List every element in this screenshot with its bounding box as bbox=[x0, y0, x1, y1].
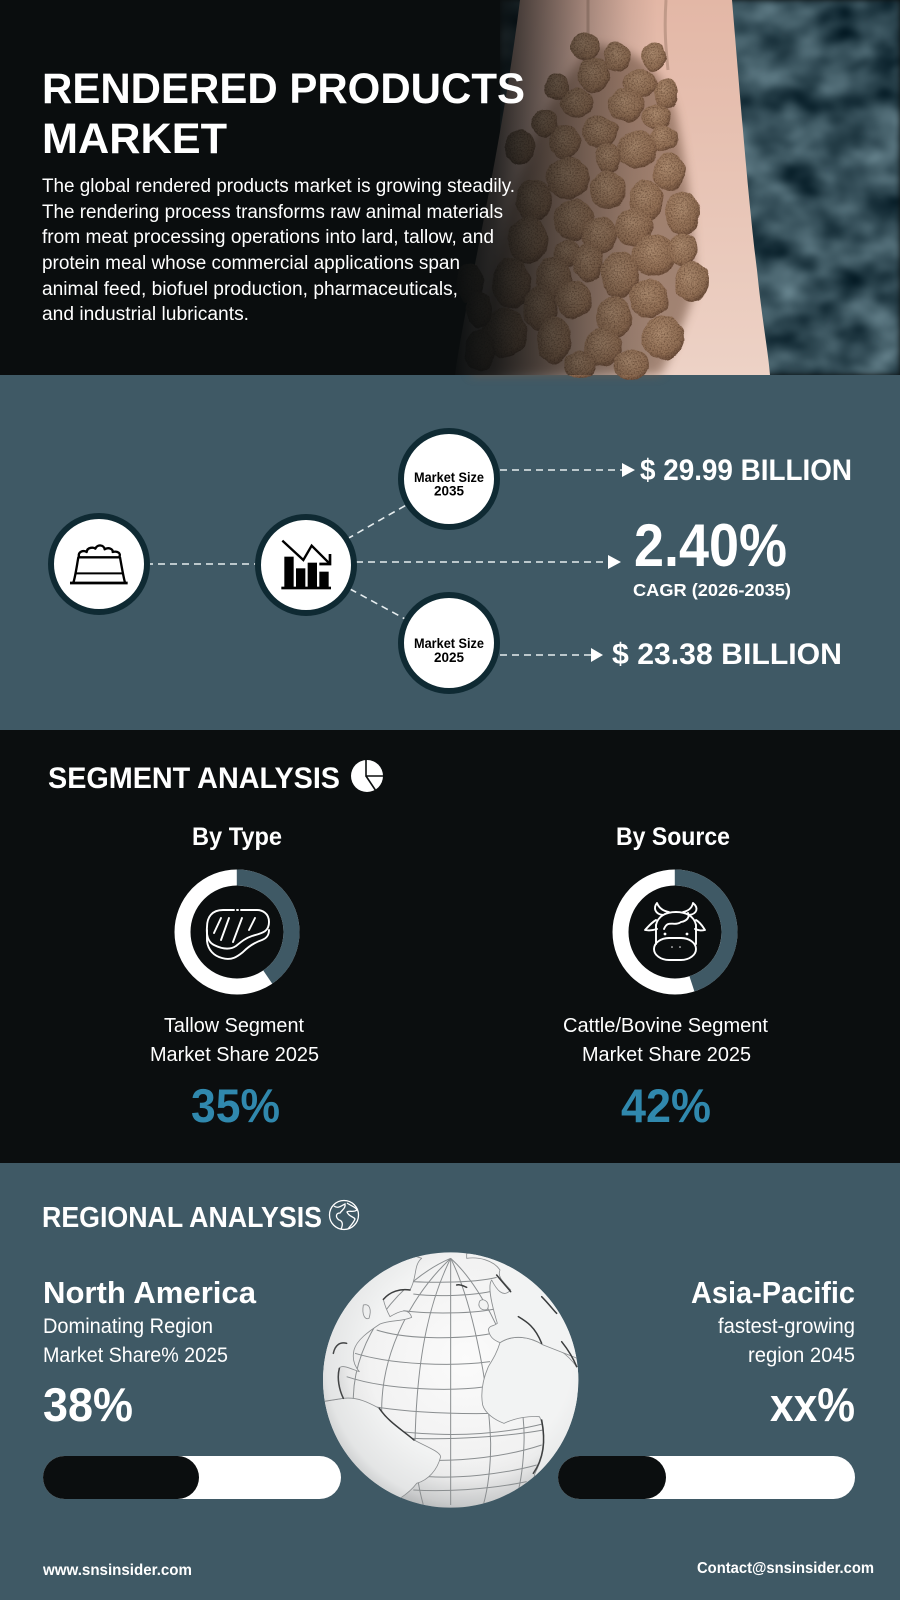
market size 2025 circle: 2025 bbox=[434, 650, 465, 665]
icon: steak bbox=[207, 910, 269, 959]
market size 2035 circle: Market Size bbox=[414, 470, 484, 485]
intro text block: The global rendered products market is growing steadily. bbox=[42, 176, 515, 197]
stat: market size 2035 value: $ 29.99 BILLION bbox=[640, 454, 852, 487]
intro text block: and industrial lubricants. bbox=[42, 304, 249, 325]
panel: north america: 38% bbox=[43, 1378, 133, 1431]
panel: north america: Market Share% 2025 bbox=[43, 1344, 228, 1367]
panel: by type bbox=[150, 823, 319, 1132]
title: RENDERED PRODUCTS bbox=[42, 65, 525, 113]
heading: segment analysis: SEGMENT ANALYSIS bbox=[48, 762, 340, 795]
icon: market chart circle bbox=[258, 517, 354, 613]
icon: pie chart bbox=[351, 758, 385, 794]
market size 2025 circle: Market Size bbox=[414, 636, 484, 651]
panel: by type: By Type bbox=[192, 823, 282, 851]
panel: north america: North America bbox=[43, 1275, 257, 1310]
intro text block bbox=[42, 176, 515, 325]
stat: CAGR: 2.40% bbox=[634, 512, 787, 579]
icon: feed bowl circle bbox=[51, 516, 147, 612]
hero photo: hand holding feed pellets bbox=[0, 0, 900, 380]
title bbox=[42, 65, 525, 163]
stat: market size 2025 value: $ 23.38 BILLION bbox=[612, 638, 842, 671]
panel: by source: Market Share 2025 bbox=[582, 1044, 751, 1066]
panel: asia-pacific: region 2045 bbox=[748, 1344, 855, 1367]
panel: north america: Dominating Region bbox=[43, 1315, 213, 1338]
land masses bbox=[323, 1254, 578, 1498]
market size 2035 circle bbox=[401, 431, 497, 527]
market size 2025 circle bbox=[401, 595, 497, 691]
heading: regional analysis: REGIONAL ANALYSIS bbox=[42, 1202, 322, 1234]
panel: by type: 35% bbox=[191, 1079, 280, 1132]
panel: by source: Cattle/Bovine Segment bbox=[563, 1015, 768, 1037]
panel: by type: Tallow Segment bbox=[164, 1015, 304, 1037]
intro text block: The rendering process transforms raw animal materials bbox=[42, 202, 503, 223]
connector lines and arrows bbox=[146, 463, 635, 662]
panel: asia-pacific: fastest-growing bbox=[718, 1315, 855, 1338]
intro text block: animal feed, biofuel production, pharmaceuticals, bbox=[42, 279, 458, 300]
panel: asia-pacific: Asia-Pacific bbox=[691, 1275, 855, 1310]
globe illustration bbox=[323, 1252, 578, 1508]
dark coast accents bbox=[333, 1275, 577, 1473]
panel: asia-pacific: xx% bbox=[770, 1378, 855, 1431]
intro text block: protein meal whose commercial applications span bbox=[42, 253, 460, 274]
panel: by source bbox=[563, 823, 768, 1132]
icon: small globe bbox=[330, 1200, 358, 1230]
panel: by type: Market Share 2025 bbox=[150, 1044, 319, 1066]
footer: contact: Contact@snsinsider.com bbox=[697, 1560, 874, 1577]
market size 2035 circle: 2035 bbox=[434, 484, 465, 498]
graticule bbox=[337, 1258, 545, 1505]
intro text block: from meat processing operations into lard, tallow, and bbox=[42, 227, 494, 248]
progress bar: asia-pacific bbox=[558, 1456, 855, 1499]
title: MARKET bbox=[42, 115, 227, 163]
panel: asia-pacific bbox=[558, 1275, 855, 1499]
panel: by source: 42% bbox=[621, 1079, 711, 1132]
panel: by source: By Source bbox=[616, 823, 730, 851]
icon: cow bbox=[645, 903, 705, 960]
stat: CAGR: CAGR (2026-2035) bbox=[633, 580, 791, 600]
progress bar: north america bbox=[43, 1456, 341, 1499]
footer: website: www.snsinsider.com bbox=[42, 1562, 192, 1579]
panel: north america bbox=[43, 1275, 341, 1499]
